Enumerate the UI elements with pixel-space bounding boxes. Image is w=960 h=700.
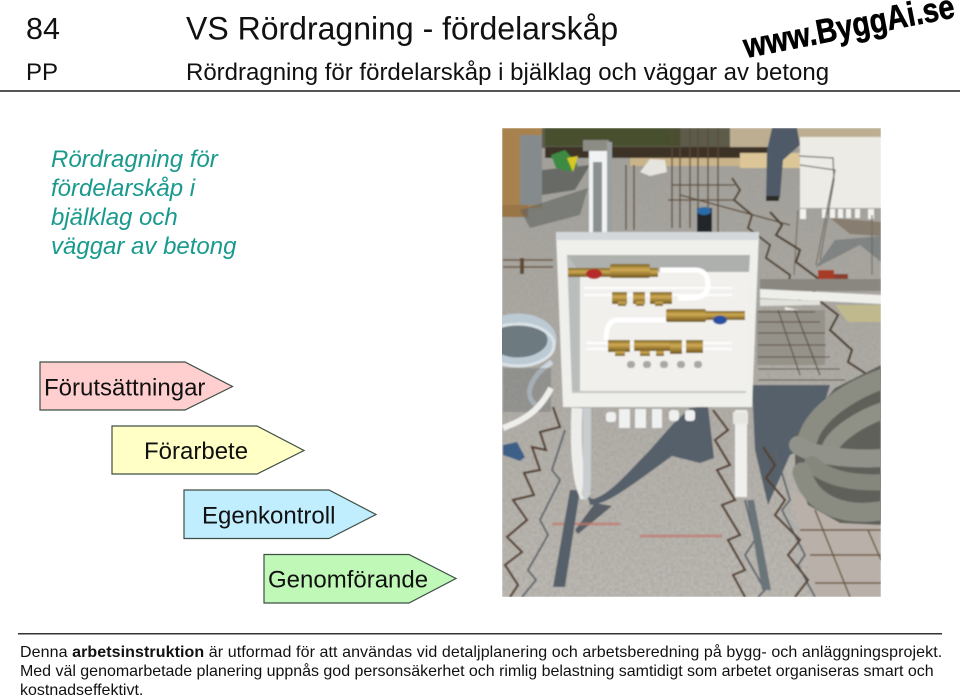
diagonal mesh strips upper right [732,178,805,305]
large grey hose coil [795,365,881,525]
arrow: Förarbete: Förarbete [144,438,248,465]
side heading: Rördragning för [51,146,219,173]
bottom pipes [606,409,695,428]
arrow: Genomförande: Genomförande [268,566,428,594]
trusses foreground [505,407,808,597]
white bag [640,159,667,176]
page number: 84 [26,12,60,46]
pipe shadows [627,361,702,368]
code PP: PP [26,59,58,86]
side heading: väggar av betong [51,233,237,260]
lower brass valve [704,310,746,321]
arrow: Förutsättningar: Förutsättningar [44,374,205,402]
arrow: Egenkontroll: Egenkontroll [202,502,335,530]
white post [589,150,608,234]
rails [584,288,732,349]
bottom right tan ground [790,490,881,597]
footer text [20,644,942,698]
rebar posts [626,128,790,232]
photo: distribution cabinet on construction site [482,128,885,597]
bottom rule [18,633,942,634]
steel supports [553,490,580,587]
upper manifold [612,292,672,306]
grey pipes and slab [760,279,881,291]
outflow pipes [576,408,586,497]
footer text: Denna arbetsinstruktion är utformad för att användas vid detaljplanering och arbetsberedning på bygg- och anläggningsprojekt. [20,644,942,660]
wood stack left [502,128,542,208]
red tool [818,270,834,282]
background band [541,128,731,148]
bottom right mesh [800,510,881,597]
red line marks [552,524,722,536]
arrow: Genomförande [264,554,456,603]
footer text: Med väl genomarbetade planering uppnås god personsäkerhet och rimlig belastning samtidigt som arbetet organiseras smart och [20,662,934,680]
ground [502,128,881,597]
coil of white hose left [484,318,552,362]
arrow: Egenkontroll [184,490,376,538]
worker [766,128,800,200]
shadow on ground [588,406,714,505]
foreground mesh right [757,310,825,365]
side heading: fördelarskåp i [51,175,196,202]
header rule [0,90,960,92]
white pipes in cabinet [660,270,708,298]
arrow: Förutsättningar [40,362,232,410]
green and yellow bag [551,150,578,172]
title: VS Rördragning - fördelarskåp [186,10,618,46]
side heading: bjälklag och [51,204,178,231]
white hose [503,388,551,428]
distant cabinet [800,137,881,208]
subtitle: Rördragning för fördelarskåp i bjälklag och väggar av betong [186,59,829,86]
arrow: Förarbete [112,426,304,474]
upper brass valve [568,268,658,277]
truss shadows [522,430,815,597]
footer text: kostnadseffektivt. [20,682,143,698]
lower manifold [608,340,703,356]
side heading [51,146,237,260]
shadow right under cabinet [752,385,830,505]
left far rebar [503,260,553,267]
cabinet [556,232,759,407]
